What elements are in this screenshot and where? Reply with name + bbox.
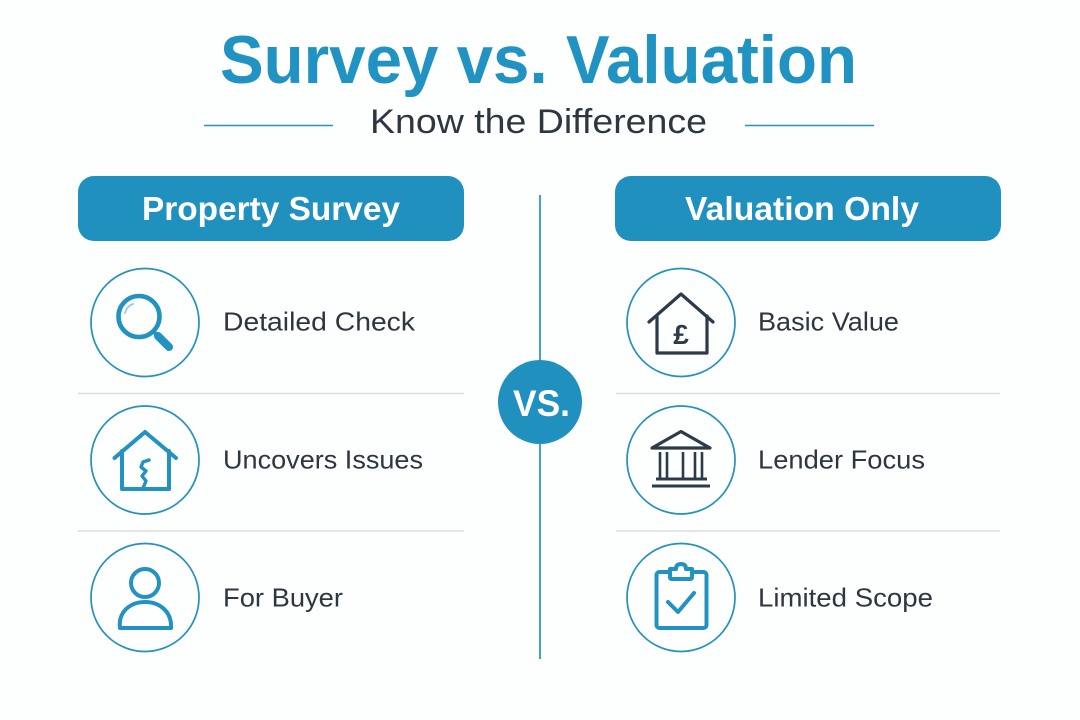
label: uncovers issues: Uncovers Issues [223,444,423,474]
icon: magnifying glass [91,268,199,376]
badge: vs: VS. [513,383,570,424]
icon: house with pound sign [627,268,735,376]
icon: bank building [627,406,735,514]
heading: valuation only: Valuation Only [685,190,920,227]
heading: property survey [78,176,464,241]
title: Survey vs. Valuation [220,22,857,98]
label: limited scope: Limited Scope [758,582,933,612]
heading: valuation only [615,176,1001,241]
label: lender focus: Lender Focus [758,444,925,474]
panel: property survey [78,176,464,652]
label: detailed check: Detailed Check [223,306,416,336]
badge: vs [498,360,582,444]
icon: house with pound sign: £ [673,319,689,350]
icon: person [91,544,199,652]
icon: clipboard with check [627,544,735,652]
label: basic value: Basic Value [758,306,899,336]
panel: valuation only [615,176,1001,652]
heading: property survey: Property Survey [142,190,401,227]
icon: house with crack [91,406,199,514]
label: for buyer: For Buyer [223,582,343,612]
subtitle: Know the Difference [370,103,707,141]
